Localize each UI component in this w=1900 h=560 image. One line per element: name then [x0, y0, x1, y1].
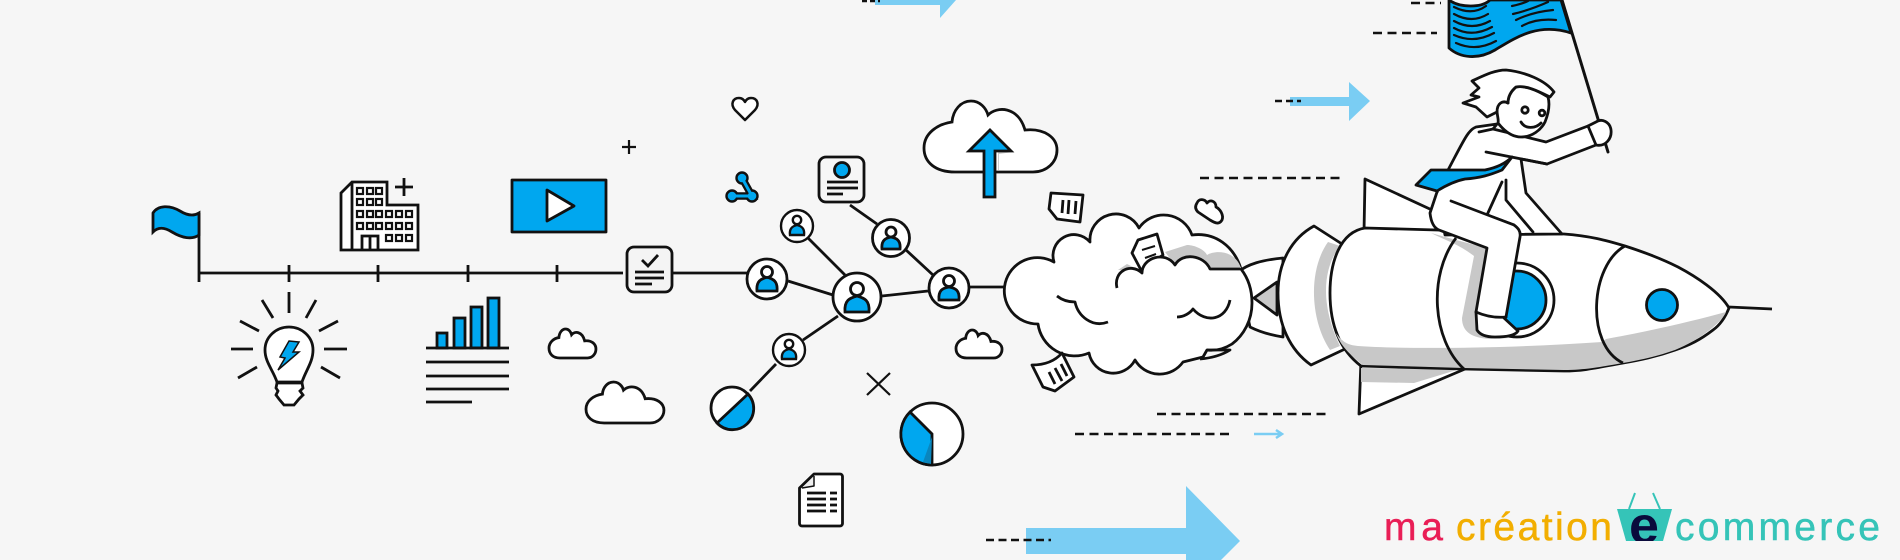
icon: light bulb — [231, 292, 347, 405]
arrow: small — [1254, 430, 1282, 438]
icon: start flag — [153, 207, 199, 238]
pilot with flag — [1416, 0, 1611, 337]
icon: flying page on cloud — [1132, 234, 1163, 270]
timeline with flag — [153, 207, 623, 282]
porthole — [1480, 263, 1554, 337]
icon: upload cloud — [924, 101, 1057, 197]
leg and shoe — [1430, 192, 1520, 337]
waving flag — [1449, 0, 1571, 57]
icon: share nodes — [726, 172, 758, 202]
cloud below network — [956, 330, 1002, 358]
head — [1497, 87, 1549, 137]
pie chart: segment — [901, 403, 963, 465]
rocket section lines — [1437, 238, 1772, 369]
logo text: création: création — [1456, 506, 1612, 549]
icon: page bottom — [1032, 353, 1074, 391]
bar chart — [426, 298, 509, 402]
icon: plus — [622, 140, 636, 154]
icon: video player — [512, 180, 606, 232]
arrow: large bottom — [986, 486, 1240, 560]
rocket body — [1330, 228, 1729, 371]
body shading — [1336, 233, 1726, 370]
rocket — [1278, 179, 1772, 414]
exhaust cloud — [1004, 200, 1283, 374]
icon: profile card — [819, 157, 864, 202]
arm detail lines — [1479, 126, 1596, 232]
icon: cross — [867, 373, 890, 395]
speed dashes — [1075, 3, 1441, 434]
logo icon: basket — [1617, 492, 1672, 541]
small cloud near timeline — [549, 329, 596, 358]
person node: lower — [773, 334, 805, 366]
person node: central — [833, 273, 881, 321]
network connectors — [673, 205, 1004, 391]
torso and arm — [1437, 120, 1611, 235]
icon: office building — [341, 178, 418, 250]
logo text: ma: ma — [1384, 506, 1443, 549]
person node: upper right — [872, 220, 910, 256]
icon: checklist card — [627, 247, 672, 292]
nose window — [1646, 290, 1678, 320]
flag pole — [1562, 0, 1608, 152]
arrow: upper right — [1275, 82, 1370, 121]
lower cloud — [586, 382, 664, 423]
arrow: top — [862, 0, 956, 18]
icon: page top — [1049, 193, 1083, 222]
logo icon: basket: e — [1629, 497, 1659, 555]
necktie — [1416, 157, 1512, 191]
face — [1521, 107, 1545, 127]
logo text: commerce: commerce — [1675, 506, 1880, 549]
icon: document — [800, 474, 842, 526]
pie chart: half — [711, 387, 754, 430]
engine ring — [1278, 226, 1345, 365]
person node: upper left — [781, 210, 813, 242]
logo: ma création e-commerce — [1386, 492, 1878, 541]
icon: heart — [732, 98, 758, 120]
person node: left — [747, 259, 787, 299]
rocket fins — [1359, 179, 1465, 414]
hair — [1463, 70, 1554, 117]
person node: right — [929, 268, 969, 308]
icon: small tilted cloud — [1196, 200, 1223, 223]
